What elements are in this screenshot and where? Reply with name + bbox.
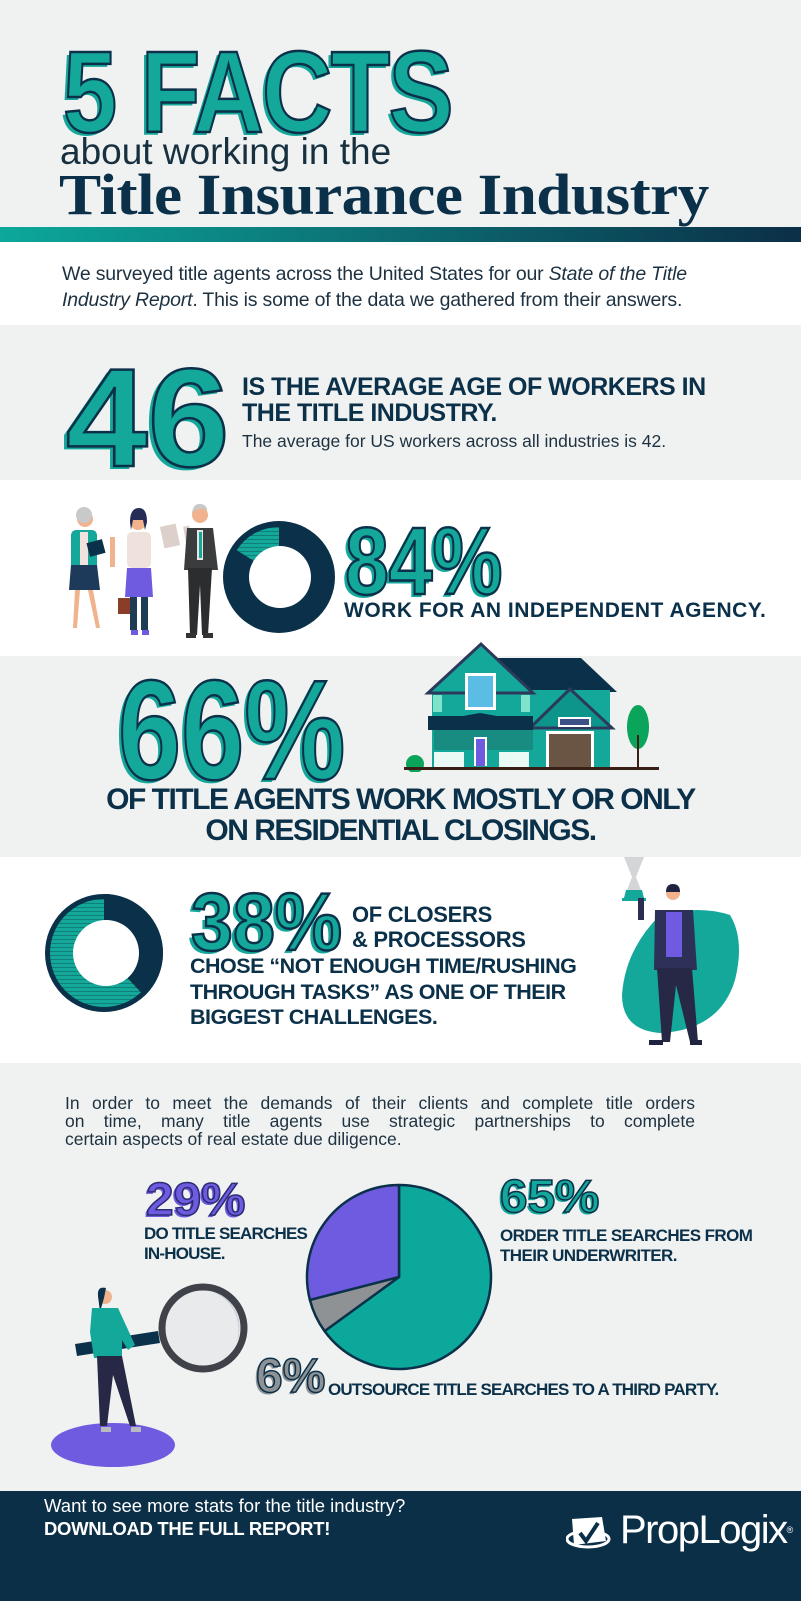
label: biggest challenges [190, 954, 576, 1029]
stat: 38%: 38% [191, 877, 342, 968]
label: underwriter: THEIR UNDERWRITER. [500, 1246, 677, 1265]
label: in-house [144, 1224, 308, 1263]
label: closers and processors [352, 902, 526, 952]
label: in-house: IN-HOUSE. [144, 1244, 225, 1263]
paragraph: strategic partnerships: In order to meet the demands of their clients and complete title orders [65, 1093, 695, 1113]
heading: average age [242, 373, 706, 427]
paragraph: strategic partnerships: certain aspects of real estate due diligence. [65, 1129, 402, 1149]
heading: average age: IS THE AVERAGE AGE OF WORKERS IN [242, 373, 706, 401]
section background: age [0, 325, 801, 480]
label: residential closings [106, 783, 696, 847]
label: residential closings: ON RESIDENTIAL CLOSINGS. [205, 814, 596, 847]
label: work for independent agency: WORK FOR AN INDEPENDENT AGENCY. [344, 599, 766, 622]
stat: 84%: 84% [345, 508, 503, 615]
paragraph: strategic partnerships: on time, many title agents use strategic partnerships to complete [65, 1111, 695, 1131]
illustration: man with hourglass [622, 857, 739, 1045]
stat: 46: 46 [66, 339, 230, 496]
illustration: woman with magnifier [51, 1284, 248, 1467]
pie chart: title search sources [306, 1184, 492, 1370]
footer text: call to action [44, 1495, 405, 1539]
section background: partnerships [0, 1063, 801, 1491]
footer text: call to action: Want to see more stats for the title industry? [44, 1495, 405, 1516]
subtext: average 42: The average for US workers across all industries is 42. [242, 431, 666, 451]
stat: 6%: 6% [256, 1350, 325, 1403]
heading: average age: THE TITLE INDUSTRY. [242, 399, 497, 427]
title: Title Insurance Industry: Title Insurance Industry [59, 162, 709, 227]
paragraph: strategic partnerships [65, 1093, 695, 1149]
label: underwriter: ORDER TITLE SEARCHES FROM [500, 1226, 752, 1245]
intro text: Industry Report. This is some of the data we gathered from their answers. [62, 289, 682, 311]
label: biggest challenges: THROUGH TASKS” AS ONE OF THEIR [190, 980, 566, 1004]
label: biggest challenges: CHOSE “NOT ENOUGH TIME/RUSHING [190, 954, 576, 978]
header background [0, 0, 801, 227]
intro text [62, 263, 687, 311]
stat: 29%: 29% [146, 1173, 245, 1225]
donut chart: 84% [223, 521, 335, 633]
illustration: house [404, 642, 659, 772]
stat: 65%: 65% [500, 1170, 599, 1222]
label: biggest challenges: BIGGEST CHALLENGES. [190, 1005, 437, 1029]
illustration: three workers [69, 504, 218, 638]
logo: PropLogix: PropLogix® [620, 1508, 792, 1552]
label: closers and processors: OF CLOSERS [352, 902, 492, 927]
label: third party: OUTSOURCE TITLE SEARCHES TO A THIRD PARTY. [328, 1380, 718, 1399]
label: underwriter [500, 1226, 752, 1265]
gradient bar [0, 227, 801, 242]
title: 5 FACTS: 5 FACTS [63, 27, 452, 157]
label: closers and processors: & PROCESSORS [352, 927, 526, 952]
subtitle: about working in the: about working in the [60, 131, 391, 172]
stat: 66%: 66% [118, 651, 345, 810]
footer [0, 1491, 801, 1601]
donut chart: 38% [45, 894, 163, 1012]
label: in-house: DO TITLE SEARCHES [144, 1224, 307, 1243]
footer text: call to action: DOWNLOAD THE FULL REPORT! [44, 1518, 330, 1539]
label: residential closings: OF TITLE AGENTS WORK MOSTLY OR ONLY [106, 783, 695, 816]
intro text: We surveyed title agents across the United States for our State of the Title [62, 263, 687, 285]
section background: residential [0, 656, 801, 857]
